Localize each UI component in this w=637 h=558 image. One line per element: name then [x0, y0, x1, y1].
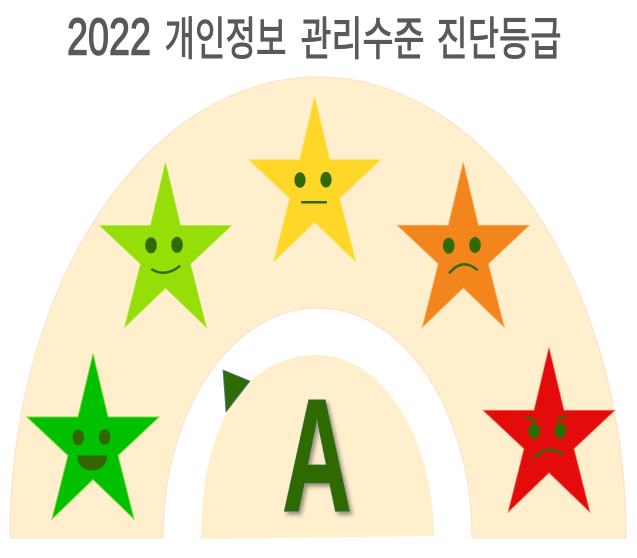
inner arch: [201, 355, 434, 539]
title: 진단등급: [436, 13, 562, 65]
star: green, very happy: [27, 354, 159, 519]
title: 개인정보: [164, 13, 286, 65]
title: 2022: [67, 8, 151, 66]
grade letter A: A: [282, 367, 352, 546]
star: orange, sad: [397, 162, 529, 327]
star: red, angry: [483, 347, 615, 512]
grade letter A: A: [282, 367, 352, 546]
outer arch band: [10, 77, 626, 538]
title: 관리수준: [300, 13, 424, 65]
star: lime, happy: [100, 162, 232, 328]
title: [67, 8, 562, 66]
star: yellow, neutral: [249, 97, 381, 262]
grade pointer triangle: [223, 370, 250, 412]
